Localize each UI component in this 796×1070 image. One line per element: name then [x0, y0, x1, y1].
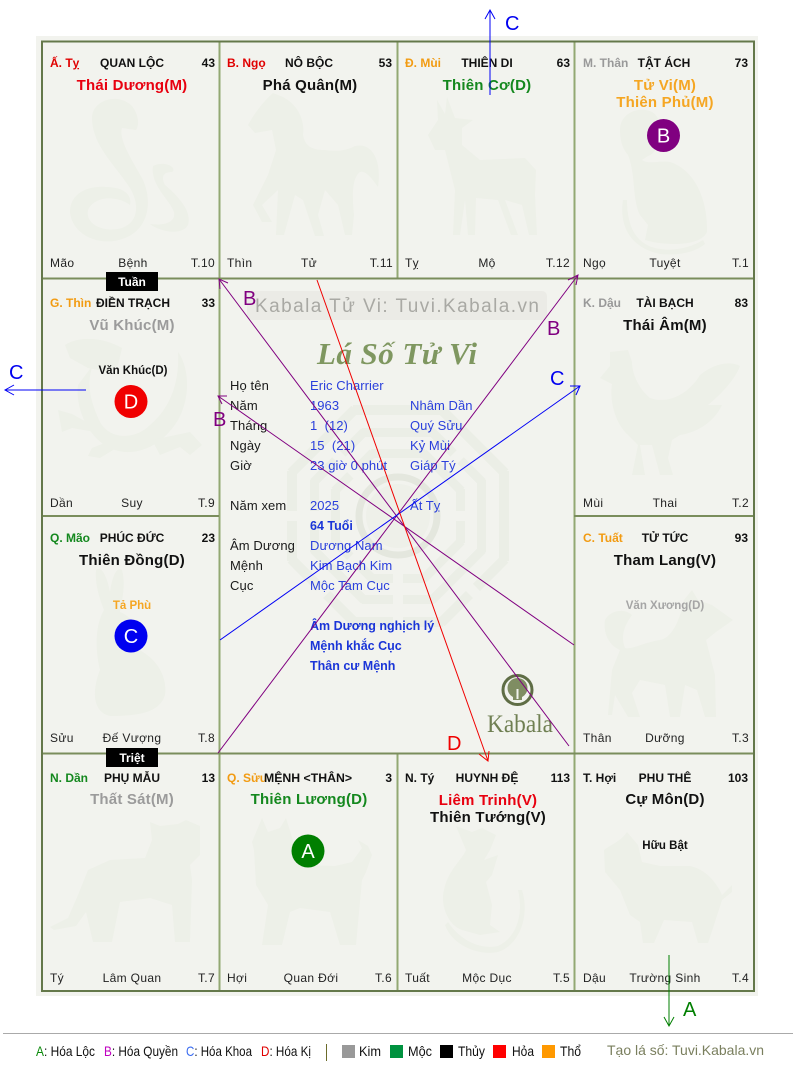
palace: Đ. Mùi / Thiên Di: T.12	[546, 256, 570, 270]
birth information block: Mệnh	[230, 558, 263, 573]
palace: G. Thìn / Điền Trạch: Suy	[121, 496, 143, 510]
palace: C. Tuất / Tử Tức: C. Tuất	[583, 531, 623, 545]
palace: M. Thân / Tật Ách: 73	[735, 56, 748, 70]
badge B: B	[657, 126, 670, 148]
palace: Ấ. Tỵ / Quan Lộc: Ấ. Tỵ	[50, 55, 80, 70]
palace: N. Dần / Phụ Mẫu: N. Dần	[50, 771, 88, 785]
legend: five elements: Kim	[359, 1043, 381, 1059]
palace: M. Thân / Tật Ách: Thiên Phủ(M)	[616, 94, 714, 111]
palace: N. Dần / Phụ Mẫu: Lâm Quan	[103, 971, 161, 985]
legend: four transformations: D: Hóa Kị	[261, 1043, 311, 1059]
palace: T. Hợi / Phu Thê: 103	[728, 771, 748, 785]
arrow letters: B	[213, 409, 226, 431]
monkey	[620, 110, 707, 255]
Kabala logo: Kabala	[487, 711, 553, 738]
Triệt tag	[106, 748, 158, 767]
watermark banner: Kabala Tử Vi: Tuvi.Kabala.vn	[255, 296, 539, 317]
palace: B. Ngọ / Nô Bộc: B. Ngọ	[227, 56, 266, 70]
palace: M. Thân / Tật Ách: Tuyệt	[649, 256, 681, 270]
palace: M. Thân / Tật Ách: TẬT ÁCH	[638, 55, 690, 70]
palace: N. Tý / Huynh Đệ: HUYNH ĐỆ	[456, 770, 518, 785]
badge C: C	[124, 626, 138, 648]
Hóa Quyền arrows (purple)	[218, 275, 578, 753]
legend: five elements: Thổ	[560, 1043, 581, 1059]
legend: five elements: Thủy	[458, 1043, 485, 1059]
birth information block: Ất Tỵ	[410, 498, 441, 513]
palace: Ấ. Tỵ / Quan Lộc: Mão	[50, 256, 74, 270]
palace: N. Dần / Phụ Mẫu: 13	[202, 771, 215, 785]
legend: four transformations: A: Hóa Lộc	[36, 1043, 95, 1059]
palace: T. Hợi / Phu Thê: Hữu Bật	[642, 840, 688, 852]
palace: K. Dậu / Tài Bạch: 83	[735, 296, 748, 310]
palace: Q. Mão / Phúc Đức: Q. Mão	[50, 531, 90, 545]
palace: Ấ. Tỵ / Quan Lộc: Bệnh	[118, 256, 148, 270]
badge A: A	[301, 841, 315, 863]
birth information block: Quý Sửu	[410, 418, 462, 433]
birth information block: Giờ	[230, 458, 252, 473]
palace: Q. Sửu / Mệnh Thân: Quan Đới	[284, 971, 338, 985]
ox	[252, 818, 372, 945]
birth information block: Giáp Tý	[410, 458, 456, 473]
legend: four transformations: C: Hóa Khoa	[186, 1043, 252, 1059]
snake	[70, 99, 189, 241]
palace: Q. Mão / Phúc Đức: PHÚC ĐỨC	[100, 530, 165, 545]
arrow letters: C	[9, 362, 23, 384]
palace: B. Ngọ / Nô Bộc: T.11	[370, 256, 393, 270]
pig	[604, 832, 732, 943]
birth information block: 15 (21)	[310, 438, 355, 453]
palace: K. Dậu / Tài Bạch: K. Dậu	[583, 296, 621, 310]
palace: N. Tý / Huynh Đệ: Tuất	[405, 971, 430, 985]
palace: C. Tuất / Tử Tức: Dưỡng	[645, 731, 685, 745]
palace: N. Dần / Phụ Mẫu	[50, 770, 215, 985]
Tuần tag	[106, 272, 158, 291]
Hóa Khoa arrow left (blue)	[5, 385, 86, 395]
palace: K. Dậu / Tài Bạch	[583, 295, 749, 510]
palace: N. Dần / Phụ Mẫu: PHỤ MẪU	[104, 770, 160, 785]
palace: Ấ. Tỵ / Quan Lộc: Thái Dương(M)	[77, 77, 187, 94]
Hóa Khoa arrow up (blue)	[485, 10, 495, 95]
palace: G. Thìn / Điền Trạch: G. Thìn	[50, 296, 91, 310]
arrow letters: D	[447, 733, 461, 755]
palace: M. Thân / Tật Ách: Ngọ	[583, 256, 606, 270]
palace: N. Tý / Huynh Đệ	[405, 770, 570, 985]
birth information block: Âm Dương nghịch lý	[310, 618, 434, 633]
palace: Đ. Mùi / Thiên Di: Mộ	[478, 256, 496, 270]
palace: N. Tý / Huynh Đệ: N. Tý	[405, 771, 435, 785]
palace: B. Ngọ / Nô Bộc: Thìn	[227, 256, 252, 270]
watermark banner	[247, 291, 547, 320]
palace: Đ. Mùi / Thiên Di: THIÊN DI	[461, 55, 513, 70]
dog	[605, 590, 733, 717]
arrow letters: C	[505, 13, 519, 35]
badge A	[292, 834, 324, 868]
chart grid lines	[41, 41, 754, 991]
palace: C. Tuất / Tử Tức: Văn Xương(D)	[626, 600, 704, 612]
script title: Lá Số Tử Vi	[316, 336, 477, 371]
palace: G. Thìn / Điền Trạch	[50, 295, 215, 510]
palace: Đ. Mùi / Thiên Di: Đ. Mùi	[405, 56, 441, 70]
footer rule	[3, 1033, 793, 1034]
palace: N. Dần / Phụ Mẫu: Thất Sát(M)	[90, 791, 174, 808]
palace: Q. Mão / Phúc Đức	[50, 530, 215, 745]
palace: Ấ. Tỵ / Quan Lộc: 43	[202, 56, 215, 70]
rooster	[600, 350, 740, 475]
palace: T. Hợi / Phu Thê: T. Hợi	[583, 771, 616, 785]
palace: Q. Mão / Phúc Đức: Sửu	[50, 731, 74, 745]
dragon	[58, 339, 202, 458]
palace: M. Thân / Tật Ách: T.1	[732, 256, 749, 270]
birth information block: Mệnh khắc Cục	[310, 638, 402, 653]
palace: T. Hợi / Phu Thê: PHU THÊ	[639, 770, 691, 785]
birth information block: 1963	[310, 398, 339, 413]
birth information block: Cục	[230, 578, 254, 593]
birth information block: Kim Bạch Kim	[310, 558, 392, 573]
palace: Q. Mão / Phúc Đức: Tả Phù	[113, 600, 151, 612]
palace: K. Dậu / Tài Bạch: Thái Âm(M)	[623, 316, 707, 334]
palace: G. Thìn / Điền Trạch: T.9	[198, 496, 215, 510]
palace: C. Tuất / Tử Tức: Thân	[583, 731, 612, 745]
palace: Q. Mão / Phúc Đức: Đế Vượng	[103, 731, 161, 745]
legend: four transformations	[36, 1043, 311, 1059]
palace: C. Tuất / Tử Tức: TỬ TỨC	[642, 530, 689, 545]
palace: N. Dần / Phụ Mẫu: T.7	[198, 971, 215, 985]
birth information block: 2025	[310, 498, 339, 513]
palace: Đ. Mùi / Thiên Di: Tỵ	[405, 256, 419, 270]
palace: Ấ. Tỵ / Quan Lộc: QUAN LỘC	[100, 55, 164, 70]
palace: M. Thân / Tật Ách: Tử Vi(M)	[634, 77, 696, 94]
palace: Đ. Mùi / Thiên Di: Thiên Cơ(D)	[443, 77, 531, 94]
palace: T. Hợi / Phu Thê: T.4	[732, 971, 749, 985]
palace: Q. Sửu / Mệnh Thân: Q. Sửu	[227, 771, 267, 785]
Triệt tag: Triệt	[119, 751, 145, 765]
palace: Q. Sửu / Mệnh Thân: MỆNH <THÂN>	[264, 770, 352, 785]
palace: K. Dậu / Tài Bạch: T.2	[732, 496, 749, 510]
birth information block: Âm Dương	[230, 538, 295, 553]
palace: T. Hợi / Phu Thê: Trường Sinh	[629, 971, 701, 985]
birth information block: Eric Charrier	[310, 378, 384, 393]
birth information block: Năm	[230, 398, 258, 413]
zodiac animal watermarks	[50, 93, 740, 953]
palace: N. Tý / Huynh Đệ: Mộc Dục	[462, 971, 512, 985]
birth information block: 23 giờ 0 phút	[310, 458, 387, 473]
goat	[428, 97, 537, 235]
palace: C. Tuất / Tử Tức	[583, 530, 749, 745]
palace: T. Hợi / Phu Thê	[583, 770, 749, 985]
palace: M. Thân / Tật Ách	[583, 55, 749, 270]
palace: K. Dậu / Tài Bạch: Thai	[653, 496, 677, 510]
palace: N. Dần / Phụ Mẫu: Tý	[50, 971, 64, 985]
legend: five elements: Hỏa	[512, 1043, 534, 1059]
birth information block: Tháng	[230, 418, 267, 433]
palace: N. Tý / Huynh Đệ: Liêm Trinh(V)	[439, 792, 537, 809]
palace: B. Ngọ / Nô Bộc: Tử	[301, 256, 317, 270]
birth information block: Nhâm Dần	[410, 398, 473, 413]
palace: N. Tý / Huynh Đệ: 113	[551, 771, 570, 785]
arrow letters: C	[550, 368, 564, 390]
palace: Q. Mão / Phúc Đức: T.8	[198, 731, 215, 745]
horse	[248, 93, 379, 236]
palace: Q. Sửu / Mệnh Thân: 3	[385, 771, 392, 785]
palace: B. Ngọ / Nô Bộc: NÔ BỘC	[285, 55, 333, 70]
palace: G. Thìn / Điền Trạch: Văn Khúc(D)	[98, 365, 168, 377]
palace: Đ. Mùi / Thiên Di	[405, 55, 570, 270]
palace: Q. Sửu / Mệnh Thân	[227, 770, 392, 985]
birth information block: Thân cư Mệnh	[310, 659, 395, 673]
Tuần tag: Tuần	[118, 275, 146, 289]
palace: K. Dậu / Tài Bạch: TÀI BẠCH	[636, 295, 694, 310]
Hóa Lộc arrow down (green)	[664, 955, 674, 1026]
palace: C. Tuất / Tử Tức: T.3	[732, 731, 749, 745]
footer credit: Tạo lá số: Tuvi.Kabala.vn	[607, 1042, 764, 1058]
arrow letters: A	[683, 999, 697, 1021]
palace: Ấ. Tỵ / Quan Lộc: T.10	[191, 256, 215, 270]
badge D: D	[124, 392, 138, 414]
palace: G. Thìn / Điền Trạch: Vũ Khúc(M)	[89, 317, 175, 334]
palace: K. Dậu / Tài Bạch: Mùi	[583, 496, 603, 510]
palace: Q. Mão / Phúc Đức: 23	[202, 531, 215, 545]
palace: T. Hợi / Phu Thê: Dậu	[583, 971, 606, 985]
Hóa Khoa arrow (blue, centre)	[220, 386, 580, 640]
palace: N. Tý / Huynh Đệ: T.5	[553, 971, 570, 985]
palace: M. Thân / Tật Ách: M. Thân	[583, 56, 628, 70]
birth information block	[230, 378, 473, 673]
rat	[443, 826, 525, 953]
palace: Q. Sửu / Mệnh Thân: T.6	[375, 971, 392, 985]
legend: five elements: Mộc	[408, 1043, 432, 1059]
palace: Q. Mão / Phúc Đức: Thiên Đồng(D)	[79, 552, 185, 569]
palace: Ấ. Tỵ / Quan Lộc	[50, 55, 215, 270]
palace: G. Thìn / Điền Trạch: Dần	[50, 496, 73, 510]
palace: C. Tuất / Tử Tức: 93	[735, 531, 748, 545]
palace: Đ. Mùi / Thiên Di: 63	[557, 56, 570, 70]
palace: G. Thìn / Điền Trạch: ĐIỀN TRẠCH	[96, 295, 170, 310]
birth information block: Ngày	[230, 438, 261, 453]
arrow letters: B	[243, 288, 256, 310]
birth information block: Kỷ Mùi	[410, 438, 450, 453]
palace: B. Ngọ / Nô Bộc: 53	[379, 56, 392, 70]
palace: G. Thìn / Điền Trạch: 33	[202, 296, 215, 310]
palace: Q. Sửu / Mệnh Thân: Hợi	[227, 971, 247, 985]
badge C	[114, 620, 148, 652]
palace: Q. Sửu / Mệnh Thân: Thiên Lương(D)	[251, 791, 367, 808]
legend: five elements	[342, 1043, 581, 1059]
rabbit	[95, 569, 165, 716]
Hóa Kị arrow (red)	[317, 280, 489, 761]
palace: T. Hợi / Phu Thê: Cự Môn(D)	[625, 791, 705, 808]
palace: B. Ngọ / Nô Bộc: Phá Quân(M)	[263, 77, 357, 94]
taiji bagua watermark	[287, 405, 509, 627]
palace: N. Tý / Huynh Đệ: Thiên Tướng(V)	[430, 809, 546, 826]
palace: B. Ngọ / Nô Bộc	[227, 55, 393, 270]
birth information block: 64 Tuổi	[310, 519, 353, 533]
birth information block: Mộc Tam Cục	[310, 578, 390, 593]
birth information block: Họ tên	[230, 378, 269, 393]
badge B	[647, 119, 680, 152]
birth information block: 1 (12)	[310, 418, 348, 433]
Kabala logo	[487, 676, 553, 738]
badge D	[114, 385, 148, 418]
palace: C. Tuất / Tử Tức: Tham Lang(V)	[614, 552, 716, 569]
birth information block: Năm xem	[230, 498, 286, 513]
arrow letters: B	[547, 318, 560, 340]
tiger	[50, 820, 200, 942]
birth information block: Dương Nam	[310, 538, 383, 553]
legend: four transformations: B: Hóa Quyền	[104, 1043, 178, 1059]
